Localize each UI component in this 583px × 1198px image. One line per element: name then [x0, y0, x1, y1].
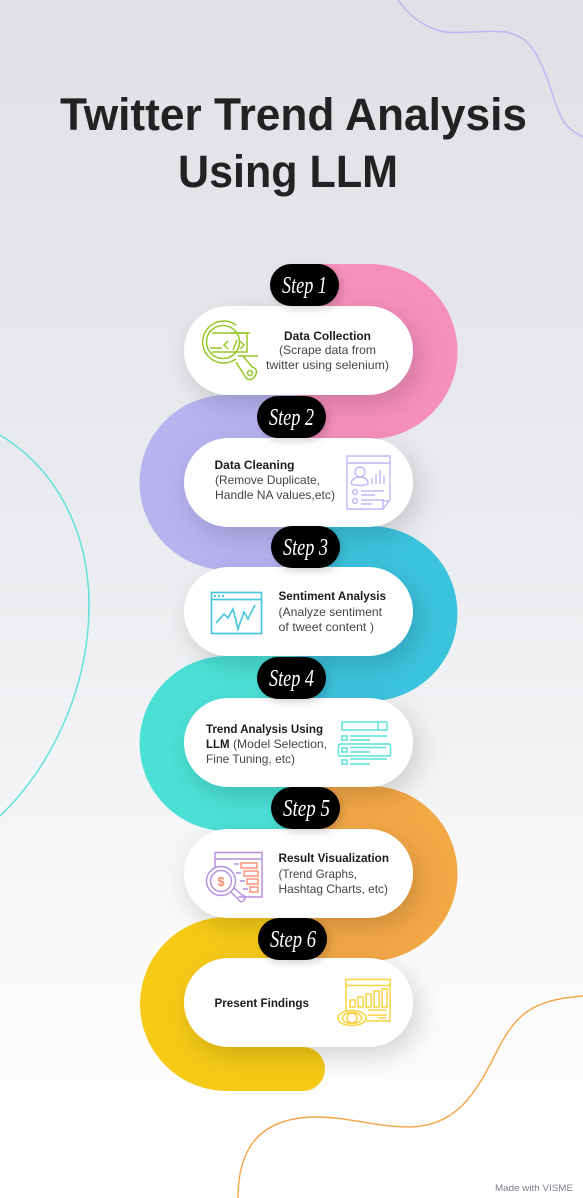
icon: list	[338, 722, 390, 764]
text: data collection	[266, 329, 389, 372]
decorative curve: orange	[238, 996, 583, 1198]
text: result visualization: (Trend Graphs,	[278, 867, 357, 881]
step 6 card	[184, 918, 413, 1047]
band: yellow	[140, 917, 325, 1091]
band: blue	[295, 526, 458, 701]
text: sentiment analysis: (Analyze sentiment	[278, 605, 383, 619]
pill	[184, 306, 413, 395]
icon: code magnifier	[203, 321, 258, 380]
band: pink	[290, 264, 458, 439]
watermark: Made with VISME	[495, 1183, 573, 1194]
badge: step 3: Step 3	[283, 535, 328, 561]
text: data collection: (Scrape data from	[279, 343, 376, 357]
text: sentiment analysis	[278, 589, 386, 634]
step 2 card	[184, 396, 413, 527]
text: data collection: Data Collection	[284, 329, 371, 343]
badge: step 2	[257, 396, 326, 438]
text: trend analysis	[206, 722, 327, 766]
text: trend analysis: Trend Analysis Using	[206, 722, 323, 736]
text: sentiment analysis: of tweet content )	[278, 620, 374, 634]
text: result visualization	[278, 851, 389, 896]
pill	[184, 829, 413, 918]
pill	[184, 567, 413, 656]
text: data cleaning: (Remove Duplicate,	[215, 473, 320, 487]
decorative curve: cyan	[0, 435, 89, 816]
pill	[184, 698, 413, 787]
pill	[184, 958, 413, 1047]
step 3 card	[184, 526, 413, 656]
text: trend analysis: Fine Tuning, etc)	[206, 752, 295, 766]
title: Using LLM	[178, 146, 398, 197]
text: result visualization: Hashtag Charts, etc)	[278, 882, 388, 896]
badge: step 2: Step 2	[269, 405, 314, 431]
badge: step 6	[258, 918, 327, 960]
text: data cleaning: Handle NA values,etc)	[215, 488, 335, 502]
text: data cleaning: Data Cleaning	[214, 458, 294, 472]
text: sentiment analysis: Sentiment Analysis	[278, 589, 386, 603]
icon: bar chart with eye	[338, 980, 390, 1026]
badge: step 1	[270, 264, 339, 306]
text: trend analysis: LLM	[206, 737, 230, 751]
pill	[184, 438, 413, 527]
band: turquoise	[140, 656, 295, 831]
step 5 card	[184, 787, 413, 918]
band: orange	[295, 786, 458, 961]
badge: step 6: Step 6	[270, 927, 316, 953]
step 1 card	[184, 264, 413, 395]
badge: step 4	[257, 657, 326, 699]
icon: dollar magnifier: $	[217, 874, 225, 889]
text: present findings: Present Findings	[214, 996, 309, 1010]
title: Twitter Trend Analysis	[60, 89, 527, 140]
icon: report	[347, 456, 390, 509]
band: purple	[140, 395, 295, 570]
icon: dollar magnifier	[206, 852, 262, 902]
badge: step 4: Step 4	[269, 666, 314, 692]
text: data collection: twitter using selenium)	[266, 358, 389, 372]
badge: step 3	[271, 526, 340, 568]
text: result visualization: Result Visualization	[278, 851, 389, 865]
text: trend analysis: (Model Selection,	[233, 737, 327, 751]
text: data cleaning	[214, 458, 335, 502]
badge: step 1: Step 1	[282, 273, 327, 299]
step 4 card	[184, 657, 413, 787]
badge: step 5: Step 5	[283, 796, 330, 822]
decorative curve: lavender	[398, 0, 583, 137]
title	[60, 89, 527, 197]
badge: step 5	[271, 787, 340, 829]
icon: line chart window	[212, 592, 262, 634]
